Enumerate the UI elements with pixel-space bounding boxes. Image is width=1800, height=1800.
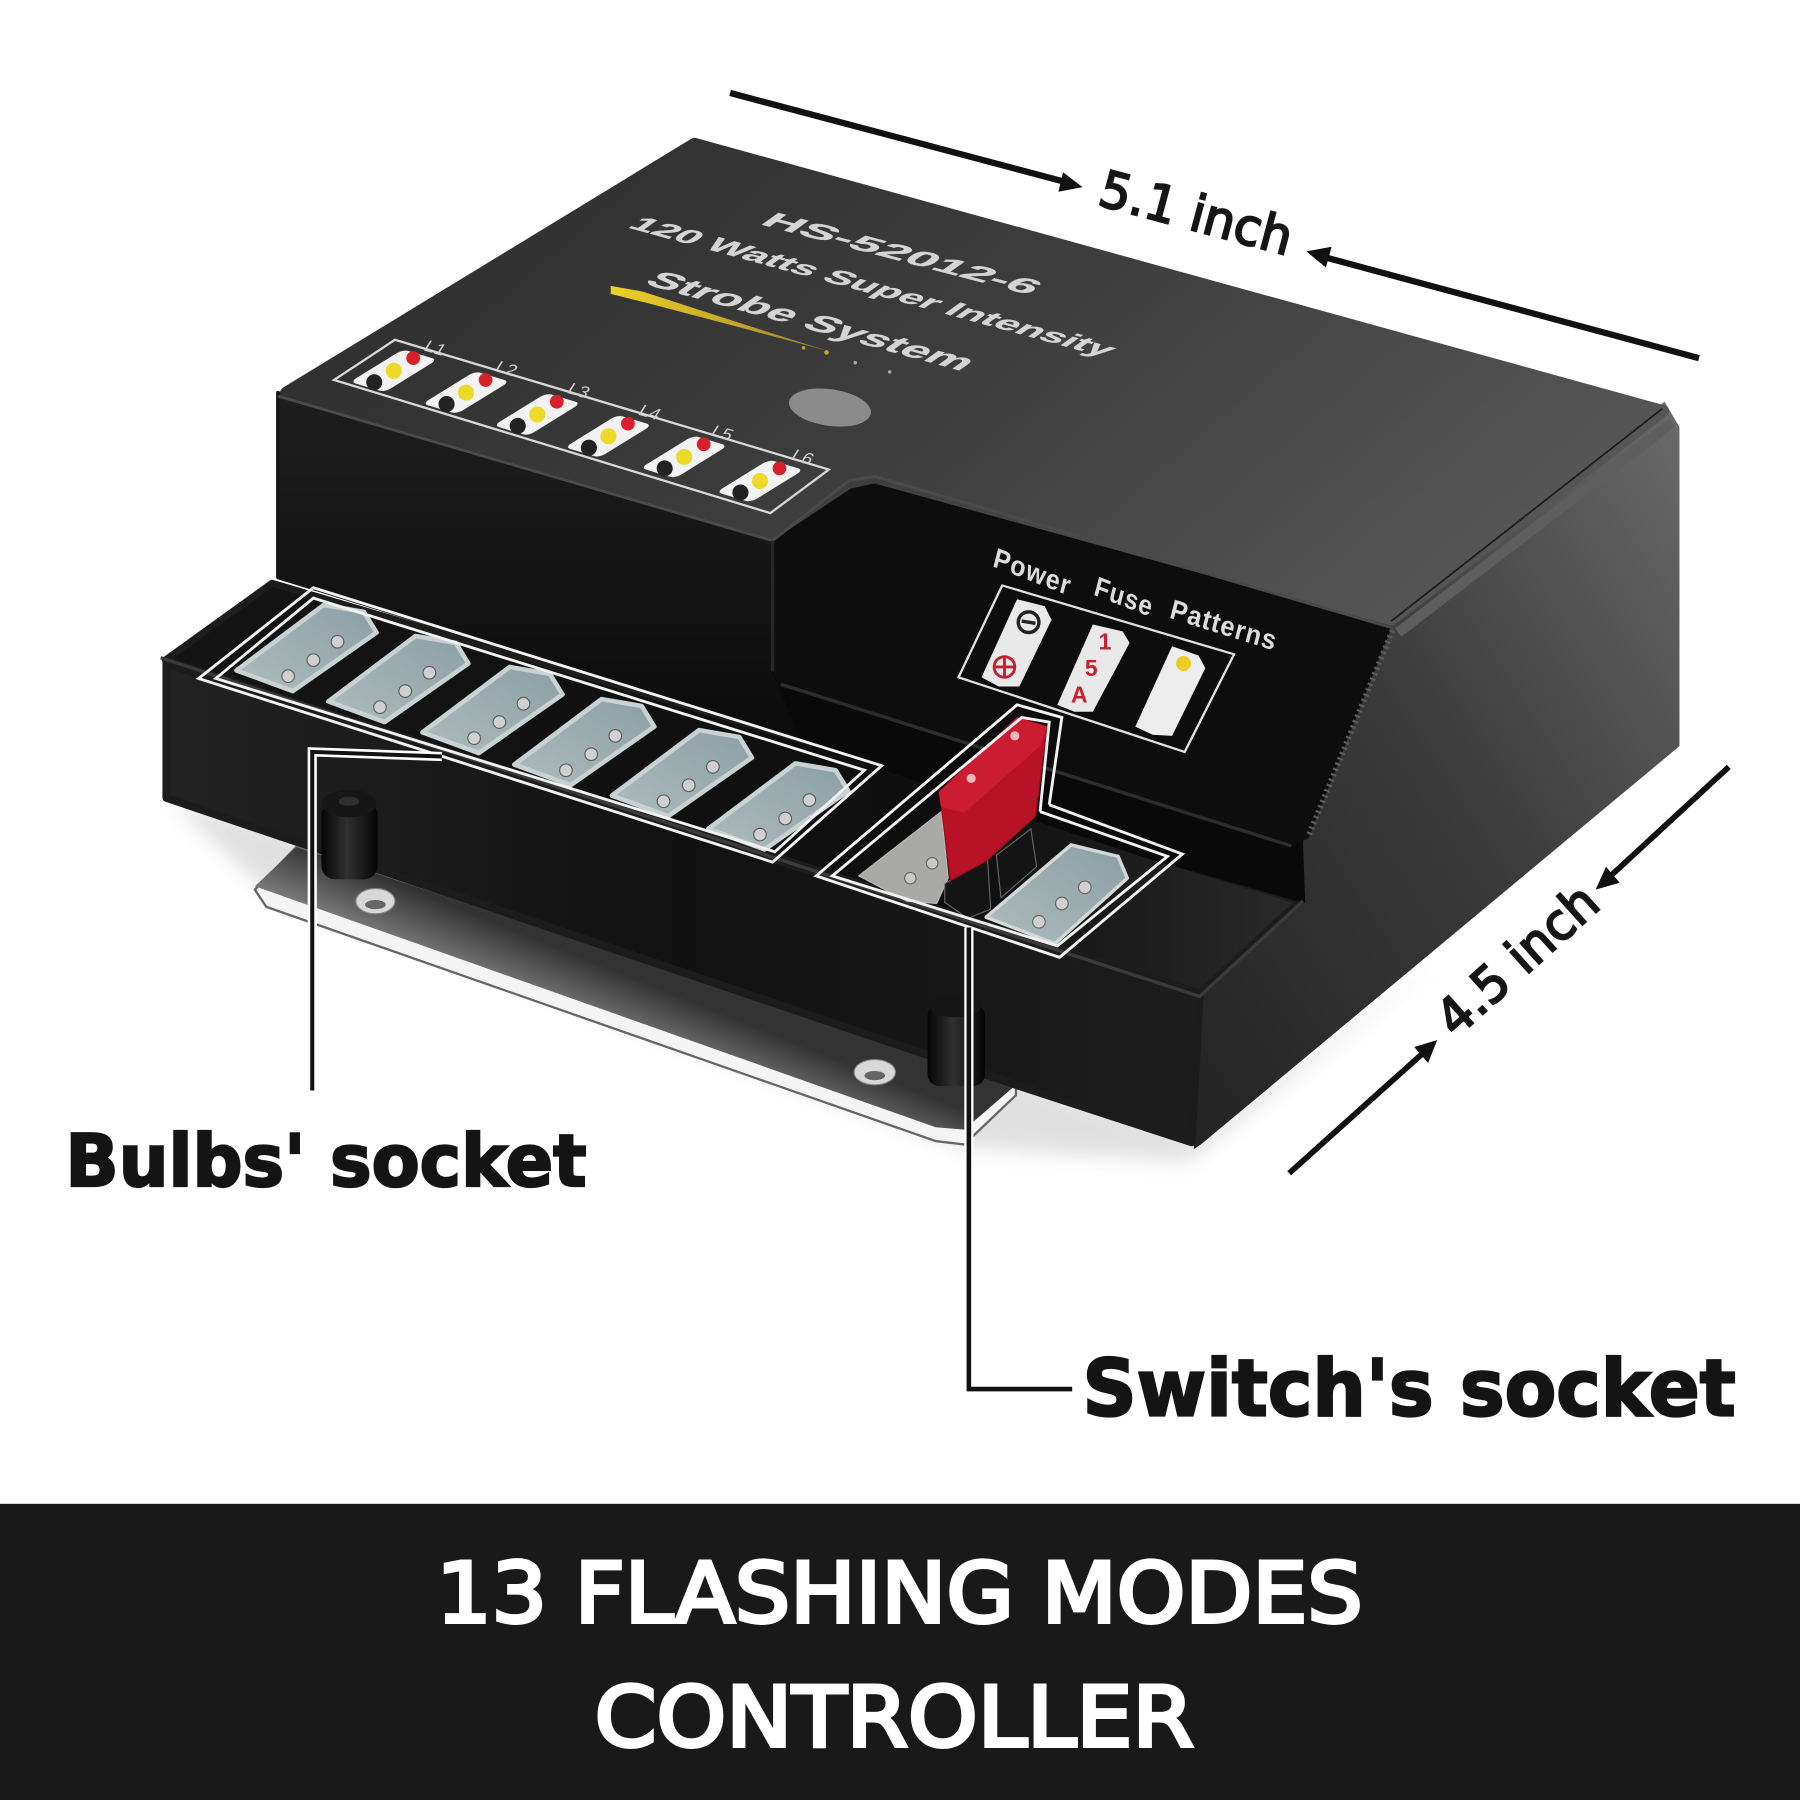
recess lower lip (771, 672, 1305, 903)
lamp labels: L6 (788, 446, 818, 468)
lamp labels: L4 (635, 401, 665, 423)
callout line: switch (969, 928, 1072, 1389)
lamp labels: L2 (492, 358, 522, 380)
standoff right (928, 994, 985, 1086)
switch socket frame (816, 705, 1182, 957)
bulb socket frame (199, 588, 882, 862)
lamp labels: L3 (564, 379, 594, 402)
lamp labels: L5 (707, 422, 737, 444)
soft shadow under controller (172, 804, 1435, 1162)
fuse clips (945, 855, 991, 918)
edge highlights (161, 396, 1673, 996)
power fuse patterns panel: Patterns (1167, 593, 1281, 656)
lower front face (166, 664, 1200, 1142)
left switch socket (859, 812, 948, 903)
controller body (161, 143, 1679, 1149)
grey button (786, 384, 873, 431)
red fuse (939, 717, 1047, 880)
power fuse patterns panel (959, 542, 1281, 752)
power fuse patterns panel: Power (990, 542, 1075, 602)
dimension label: depth: 4.5 inch (1424, 872, 1610, 1048)
sockets (236, 605, 848, 849)
label: bulbs socket: Bulbs' socket (65, 1120, 587, 1204)
switch sockets group (816, 705, 1182, 957)
dimension arrow: depth, lower part (1289, 1040, 1437, 1173)
fuse slot: 5 (1085, 655, 1098, 681)
printed model text (622, 208, 1124, 375)
step top surface (165, 583, 1299, 993)
standoff left (321, 790, 378, 879)
fuse slot (1057, 624, 1130, 712)
printed model text: HS-52012-6 (754, 208, 1051, 299)
dimension arrow: width, right part (1306, 247, 1699, 358)
fuse slot: 1 (1099, 629, 1112, 655)
patterns slot (1135, 646, 1205, 736)
top face (286, 143, 1663, 620)
mounting plate (255, 847, 1016, 1145)
callout line: bulbs (312, 752, 442, 1091)
lamp labels: L1 (420, 337, 450, 359)
dimension arrow: depth, upper part (1596, 767, 1729, 890)
lamp labels (420, 337, 818, 468)
right switch socket (986, 845, 1127, 944)
printed model text: Strobe System (637, 267, 985, 375)
dimension arrow: width, left part (730, 93, 1083, 192)
fuse slot: A (1071, 682, 1088, 708)
lamp pills (350, 349, 804, 502)
recess wall (771, 472, 1392, 846)
bulb sockets group (199, 588, 882, 862)
dimension label: width: 5.1 inch (1093, 159, 1299, 267)
banner title line 2: CONTROLLER (595, 1670, 1194, 1766)
right side face (1194, 402, 1679, 1149)
main front wall (278, 393, 804, 740)
label: switch socket: Switch's socket (1083, 1344, 1736, 1434)
power fuse patterns panel: Fuse (1091, 570, 1157, 623)
power slot (982, 599, 1052, 686)
banner title line 1: 13 FLASHING MODES (436, 1546, 1363, 1642)
printed model text: 120 Watts Super Intensity (622, 213, 1124, 361)
yellow streak logo (611, 286, 891, 374)
bottom banner (0, 1504, 1800, 1800)
indicator panel L1-L6 (334, 337, 829, 513)
